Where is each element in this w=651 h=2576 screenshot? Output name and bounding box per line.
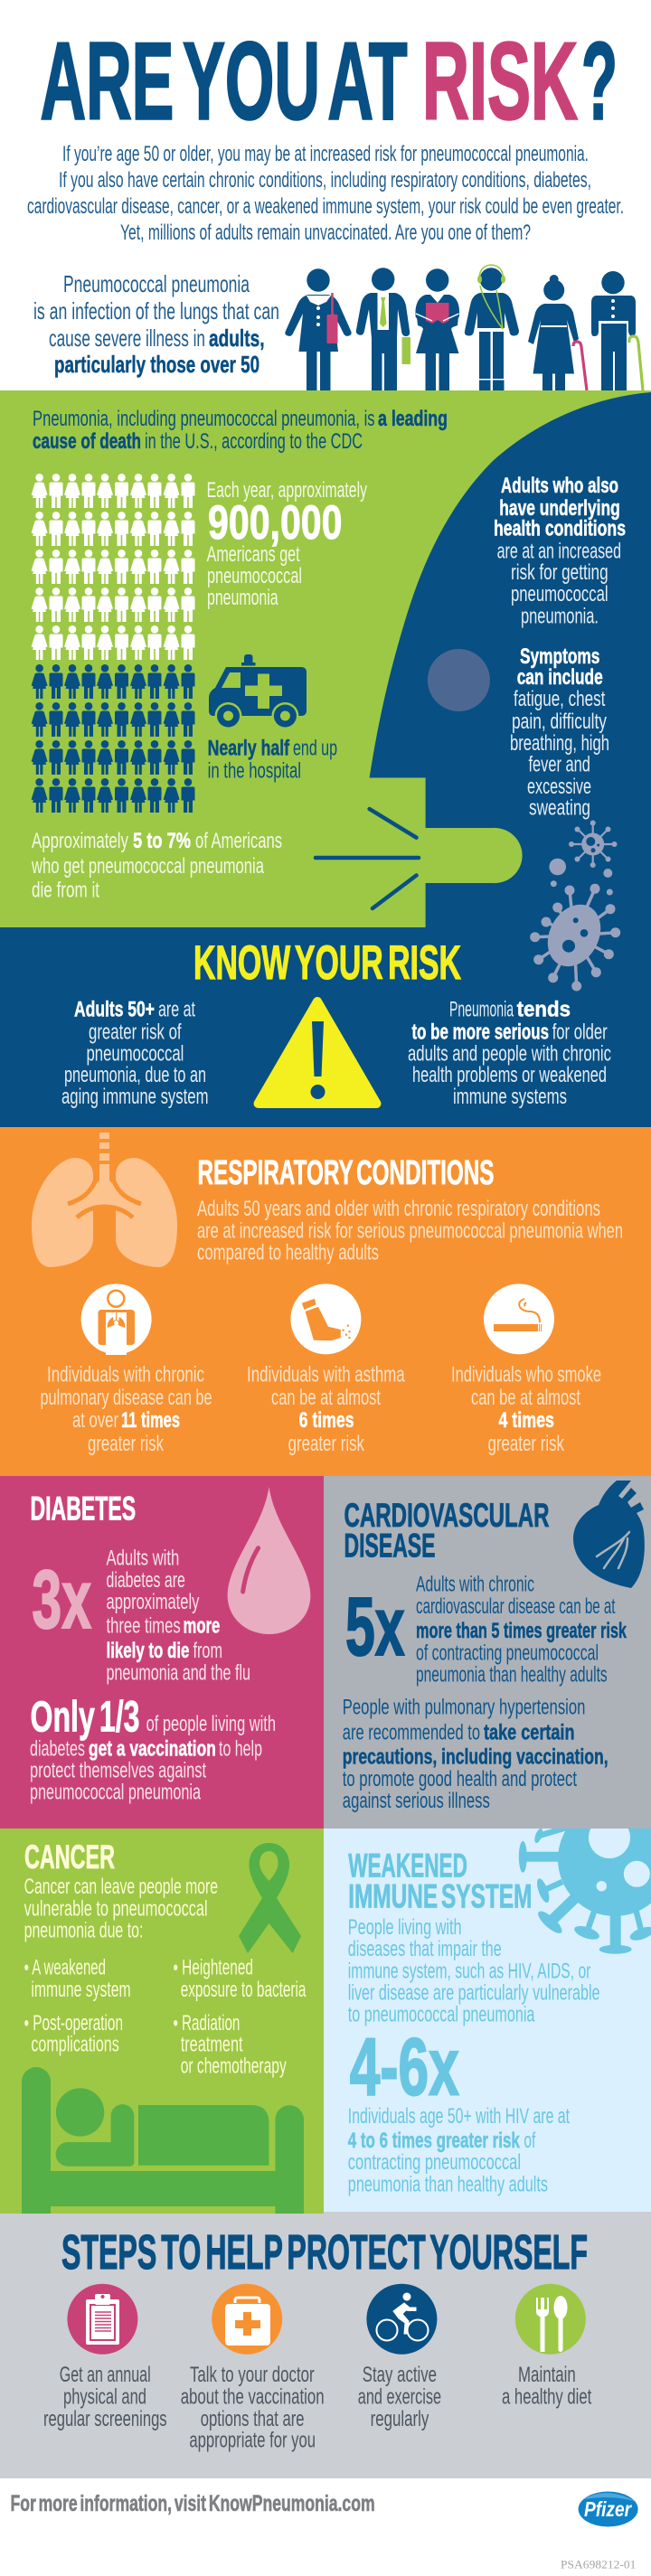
death likelihood text: three times — [107, 1614, 181, 1639]
head profile silhouette — [370, 392, 651, 927]
risk column: asthma: can be at almost — [271, 1386, 381, 1410]
hiv risk text: pneumonia than healthy adults — [348, 2172, 548, 2196]
definition text block: particularly those over 50 — [54, 351, 259, 378]
adult woman with bag — [285, 268, 352, 390]
bullets right: treatment — [181, 2032, 243, 2056]
symptoms text: Symptoms — [520, 644, 599, 669]
intro text block — [27, 142, 624, 245]
icon: small virus — [549, 821, 617, 895]
serious illness text — [408, 998, 611, 1109]
step text: doctor: about the vaccination — [181, 2384, 325, 2409]
step text: exercise: and exercise — [358, 2384, 441, 2409]
leading cause text: in the U.S., according to the CDC — [145, 429, 363, 454]
description: pneumonia due to: — [24, 1918, 143, 1942]
hiv risk text: 4 to 6 times greater risk — [348, 2129, 520, 2153]
pictogram grid: navy — [32, 664, 194, 813]
bullets left: complications — [31, 2032, 119, 2056]
step text: annual — [43, 2363, 167, 2431]
risk column: pulmonary: at over — [72, 1408, 118, 1433]
hiv risk text: contracting pneumococcal — [348, 2150, 521, 2175]
logo: Pfizer: Pfizer — [584, 2497, 632, 2521]
panel: respiratory conditions — [0, 1127, 651, 1476]
death rate text: who get pneumococcal pneumonia — [31, 854, 264, 879]
risk column: asthma: Individuals with asthma — [247, 1363, 405, 1387]
step text: exercise: regularly — [371, 2407, 429, 2431]
panel: cancer — [0, 1829, 324, 2214]
vaccination text: to help — [219, 1737, 262, 1762]
bullets left: • Post-operation — [24, 2011, 123, 2035]
hypertension text — [343, 1696, 609, 1813]
vaccination text: pneumococcal pneumonia — [30, 1781, 201, 1805]
icon: inhaler — [290, 1283, 361, 1354]
hospital text — [208, 737, 337, 783]
icon: lungs — [32, 1133, 177, 1270]
underlying conditions text: pneumonia. — [521, 604, 599, 629]
death likelihood text — [107, 1547, 250, 1686]
older adults text: pneumococcal — [87, 1041, 184, 1067]
step text: diet: a healthy diet — [502, 2384, 592, 2409]
panel: cardiovascular disease — [324, 1476, 651, 1829]
description — [24, 1875, 218, 1942]
statistic 900,000: Americans get — [207, 542, 300, 567]
death likelihood text: more — [183, 1614, 220, 1639]
underlying conditions text: pneumococcal — [511, 582, 609, 606]
step text: diet — [502, 2363, 592, 2409]
older adults text: are at — [158, 998, 195, 1021]
step text: annual: Get an annual — [60, 2363, 151, 2387]
facial eye — [428, 649, 490, 711]
bullets right: exposure to bacteria — [181, 1978, 307, 2002]
hospital text: in the hospital — [208, 759, 301, 783]
step text: annual: regular screenings — [43, 2407, 167, 2431]
hiv risk text — [348, 2104, 570, 2196]
heading: DISEASE — [344, 1527, 436, 1564]
older adults text: Adults 50+ — [74, 998, 155, 1021]
logo: Pfizer — [579, 2491, 638, 2527]
panel: steps to protect yourself — [0, 2212, 651, 2478]
cardiovascular risk text: Adults with chronic — [416, 1573, 534, 1597]
title: ? — [581, 20, 618, 143]
statistic 900,000: 900,000 — [208, 496, 342, 550]
serious illness text: to be more serious — [412, 1020, 549, 1044]
vaccination text: get a vaccination — [89, 1737, 216, 1762]
death likelihood text: likely to die — [107, 1639, 189, 1663]
vaccination text: of people living with — [146, 1712, 276, 1736]
underlying conditions text: risk for getting — [511, 560, 609, 585]
cardiovascular risk text — [416, 1573, 627, 1688]
statistic 900,000: Each year, approximately — [207, 478, 367, 503]
symptoms text: pain, difficulty — [512, 710, 607, 734]
description: People living with — [348, 1915, 462, 1940]
leading cause text — [33, 407, 448, 454]
panel: weakened immune system — [324, 1802, 651, 2212]
risk column: smoking: can be at almost — [471, 1386, 580, 1410]
symptoms text: fever and — [528, 753, 590, 777]
serious illness text: tends — [517, 998, 571, 1021]
risk column: asthma: 6 times — [299, 1408, 354, 1433]
definition text block — [33, 270, 279, 378]
step text: doctor — [181, 2363, 325, 2453]
leading cause text: cause of death — [33, 429, 141, 454]
risk column: pulmonary — [40, 1363, 212, 1456]
bullets right: • Heightened — [174, 1955, 253, 1979]
risk column: pulmonary: Individuals with chronic — [47, 1363, 204, 1387]
description: diseases that impair the — [348, 1937, 502, 1961]
icon: warning triangle — [259, 1001, 376, 1104]
panel: know your risk — [0, 821, 651, 1127]
icon: blood drop — [228, 1487, 310, 1634]
risk column: pulmonary: 11 times — [121, 1408, 180, 1433]
risk column: smoking: greater risk — [488, 1432, 565, 1456]
definition text block: is an infection of the lungs that can — [33, 297, 279, 324]
hypertension text: against serious illness — [343, 1789, 490, 1813]
serious illness text: Pneumonia — [449, 998, 514, 1021]
risk column: asthma — [247, 1363, 405, 1456]
icon: person with lungs — [81, 1283, 152, 1355]
adult man with tie and briefcase — [356, 268, 410, 390]
risk column: pulmonary: greater risk — [88, 1432, 165, 1456]
heading: RESPIRATORY CONDITIONS — [197, 1154, 494, 1192]
icon: fork and spoon — [515, 2284, 586, 2355]
serious illness text: immune systems — [453, 1085, 567, 1109]
icon: awareness ribbon — [239, 1843, 301, 1953]
symptoms text: can include — [517, 665, 603, 690]
stat 3x: 3x — [32, 1554, 91, 1646]
icon: cigarette — [484, 1283, 554, 1354]
definition text block: Pneumococcal pneumonia — [63, 270, 250, 297]
definition text block: adults, — [209, 324, 264, 352]
definition text block: cause severe illness in — [49, 324, 205, 352]
statistic 900,000: pneumonia — [207, 586, 278, 610]
heading: DIABETES — [31, 1490, 136, 1528]
heading — [348, 1847, 532, 1915]
description: Cancer can leave people more — [24, 1875, 218, 1899]
hospital text: Nearly half — [208, 737, 290, 761]
risk column: smoking — [451, 1363, 601, 1456]
bullets left: immune system — [31, 1978, 131, 2002]
icon: first aid kit — [212, 2284, 282, 2355]
vaccination text: protect themselves against — [30, 1759, 206, 1783]
death rate text: Approximately — [32, 829, 128, 853]
cough lines — [316, 809, 419, 908]
vaccination text: Only 1/3 — [31, 1694, 139, 1741]
older woman with cane — [528, 275, 587, 390]
serious illness text: for older — [552, 1020, 608, 1044]
vaccination text: diabetes — [30, 1737, 85, 1762]
icon: hospital bed — [22, 2067, 304, 2214]
death rate text: 5 to 7% — [133, 829, 191, 853]
heading: KNOW YOUR RISK — [193, 936, 461, 990]
illustration: six adults — [285, 265, 643, 390]
symptoms text: breathing, high — [510, 731, 609, 756]
symptoms text: excessive — [527, 775, 591, 799]
death likelihood text: pneumonia and the flu — [107, 1661, 250, 1686]
older adults text: greater risk of — [89, 1020, 182, 1044]
older man with cane — [591, 271, 643, 390]
heading: IMMUNE SYSTEM — [348, 1878, 532, 1915]
heading — [344, 1497, 550, 1564]
statistic 900,000: pneumococcal — [207, 564, 302, 588]
heading: CANCER — [24, 1838, 115, 1876]
document code: PSA698212-01 — [561, 2558, 636, 2571]
stat 5x: 5x — [345, 1581, 405, 1673]
symptoms text: sweating — [529, 795, 590, 821]
death rate text: die from it — [32, 879, 99, 903]
older adults text: aging immune system — [61, 1085, 208, 1109]
bullets right: or chemotherapy — [181, 2054, 287, 2078]
hospital text: end up — [293, 737, 337, 761]
description — [348, 1915, 600, 2027]
step text: doctor: appropriate for you — [189, 2429, 316, 2453]
icon: ambulance — [209, 654, 307, 729]
icon: heart — [573, 1481, 645, 1588]
description: vulnerable to pneumococcal — [24, 1896, 208, 1921]
panel: diabetes — [0, 1476, 324, 1829]
adult woman with folder — [416, 268, 459, 390]
bullets right — [174, 1955, 307, 2078]
death likelihood text: diabetes are — [107, 1568, 185, 1593]
description: to pneumococcal pneumonia — [348, 2003, 535, 2027]
symptoms text — [510, 644, 609, 821]
icon: clipboard — [67, 2284, 137, 2355]
panel: pneumonia facts — [0, 390, 651, 927]
hypertension text: take certain — [484, 1720, 575, 1744]
symptoms text: fatigue, chest — [514, 687, 606, 711]
icon: virus — [519, 1829, 651, 1954]
heading: WEAKENED — [348, 1847, 467, 1884]
death likelihood text: from — [193, 1639, 222, 1663]
death likelihood text: Adults with — [107, 1547, 179, 1571]
adult with headphones — [465, 265, 519, 390]
step text: exercise — [358, 2363, 441, 2431]
older adults text — [61, 998, 208, 1109]
death rate text: of Americans — [195, 829, 282, 853]
hiv risk text: of — [524, 2129, 536, 2153]
step text: doctor: Talk to your doctor — [190, 2363, 315, 2387]
death likelihood text: approximately — [107, 1590, 199, 1614]
description: compared to healthy adults — [197, 1241, 379, 1265]
risk column: smoking: 4 times — [498, 1408, 554, 1433]
stat 4-6x: 4-6x — [350, 2023, 459, 2113]
step text: doctor: options that are — [201, 2407, 304, 2431]
step text: annual: physical and — [63, 2384, 146, 2409]
description — [197, 1197, 623, 1265]
bullets left: • A weakened — [24, 1955, 106, 1979]
leading cause text: a leading — [378, 407, 448, 431]
bullets right: • Radiation — [174, 2011, 240, 2035]
footer link: For more information, visit KnowPneumonia.com — [11, 2491, 375, 2516]
statistic 900,000 — [207, 478, 367, 610]
underlying conditions text — [494, 474, 626, 629]
leading cause text: Pneumonia, including pneumococcal pneumonia, is — [33, 407, 375, 431]
risk column: pulmonary: pulmonary disease can be — [40, 1386, 212, 1410]
vaccination text — [30, 1694, 276, 1805]
hypertension text: are recommended to — [343, 1720, 480, 1744]
death rate text — [31, 829, 282, 903]
risk column: asthma: greater risk — [288, 1432, 365, 1456]
heading: CARDIOVASCULAR — [344, 1497, 550, 1534]
older adults text: pneumonia, due to an — [64, 1063, 206, 1087]
icon: cyclist — [366, 2284, 437, 2355]
bullets left — [24, 1955, 131, 2056]
step text: exercise: Stay active — [363, 2363, 437, 2387]
step text: diet: Maintain — [518, 2363, 576, 2387]
icon: large virus — [530, 884, 620, 991]
pictogram grid: white — [32, 474, 194, 660]
